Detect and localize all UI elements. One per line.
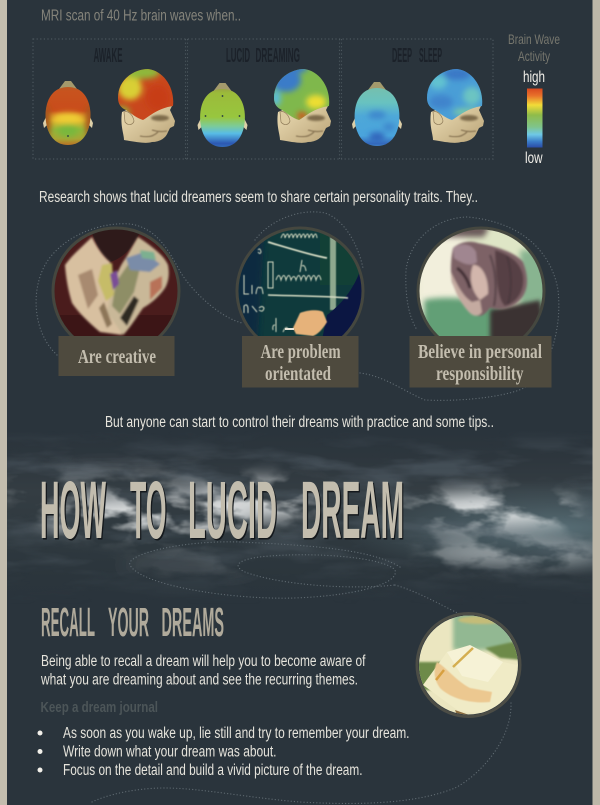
panel: MRI scan comparison: SLEEP (419, 44, 442, 67)
cloud banner (7, 441, 592, 580)
legend low label: low (525, 150, 543, 167)
legend colour scale (527, 88, 542, 148)
tips list: Write down what your dream was about. (63, 744, 276, 760)
recall paragraph: what you are dreaming about and see the recurring themes. (40, 672, 358, 688)
label: believe in personal responsibility: Believe in personal (418, 341, 542, 363)
legend title (508, 31, 560, 64)
brain map: awake side view (118, 69, 175, 143)
recall paragraph: Being able to recall a dream will help you to become aware of (41, 653, 366, 670)
heading: deep sleep: DEEP (392, 44, 412, 67)
legend title: Brain Wave (508, 31, 560, 47)
legend high label: high (523, 69, 545, 86)
title: HOW (40, 465, 106, 556)
right page edge (592, 0, 600, 805)
brain map: lucid dreaming top view (198, 83, 248, 150)
label: are problem orientated: Are problem (261, 341, 341, 363)
left page edge (0, 0, 7, 805)
label: are creative: Are creative (78, 346, 156, 368)
title: LUCID (189, 466, 278, 558)
text: DREAM (301, 465, 404, 556)
tips list: Focus on the detail and build a vivid picture of the dream. (63, 762, 362, 779)
tips list: As soon as you wake up, lie still and try to remember your dream. (63, 725, 410, 742)
text: DREAMS (162, 599, 224, 645)
title: TO (131, 466, 168, 558)
label: are problem orientated: orientated (265, 363, 331, 385)
label: are creative (58, 336, 174, 376)
brain map: deep sleep side view (425, 68, 485, 143)
tips list (38, 725, 410, 779)
title: LUCID (188, 465, 277, 556)
recall paragraph (40, 653, 366, 688)
panel: MRI scan comparison: DREAMING (256, 44, 300, 67)
research statement: Research shows that lucid dreamers seem to share certain personality traits. They.. (39, 189, 478, 206)
subheading: keep a dream journal: Keep a dream journal (40, 699, 158, 716)
title: TO (130, 465, 166, 556)
section heading: recall your dreams: YOUR (108, 599, 149, 645)
label: believe in personal responsibility (410, 336, 552, 388)
brain map: awake top view (43, 81, 93, 145)
photo: writing in journal (416, 612, 522, 722)
brain map: deep sleep top view (352, 82, 402, 149)
photo: pointing finger (416, 226, 546, 336)
panel: MRI scan comparison (33, 39, 493, 159)
text: DREAM (302, 466, 405, 558)
intro caption: MRI scan of 40 Hz brain waves when.. (41, 8, 241, 24)
title (40, 465, 405, 558)
practice statement: But anyone can start to control their dreams with practice and some tips.. (105, 414, 494, 431)
legend title: Activity (518, 48, 550, 64)
legend: brain wave activity (508, 31, 560, 167)
title: HOW (41, 466, 107, 558)
label: are problem orientated (242, 336, 358, 388)
panel: MRI scan comparison: AWAKE (94, 44, 122, 67)
label: believe in personal responsibility: responsibility (436, 363, 524, 385)
heading: lucid dreaming: LUCID (226, 44, 250, 67)
photo: blackboard (236, 226, 364, 336)
dotted connector paths (36, 212, 559, 803)
section heading: recall your dreams: RECALL (41, 599, 95, 645)
brain map: lucid dreaming side view (274, 69, 331, 143)
photo card: are creative (50, 225, 552, 388)
photo: painted hands (52, 226, 180, 336)
